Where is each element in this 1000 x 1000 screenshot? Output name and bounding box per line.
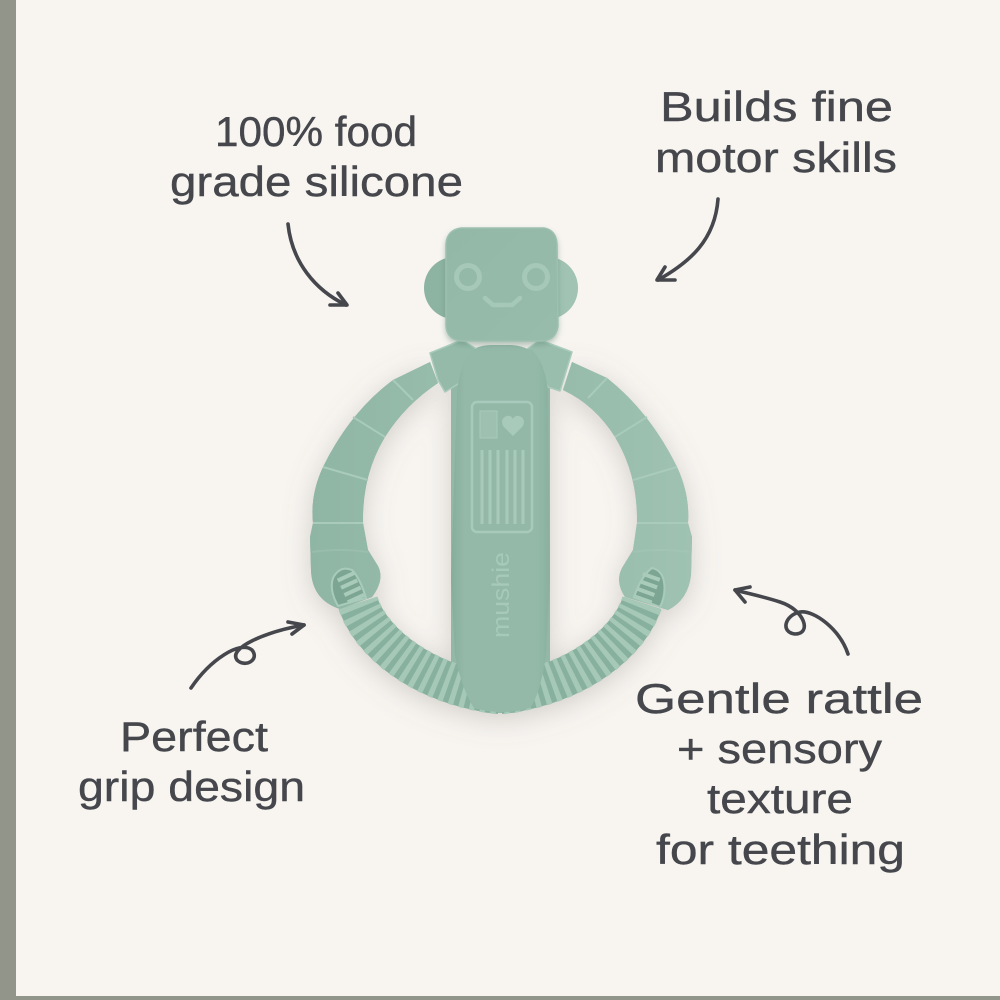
right hand slot [634, 568, 664, 607]
right eye [524, 266, 548, 288]
label: food grade silicone: 100% food [215, 108, 417, 155]
ear right [518, 257, 578, 319]
torso [451, 346, 550, 712]
arm segment lines [312, 378, 690, 552]
left frame bar [0, 0, 16, 1000]
label: food grade silicone: grade silicone [170, 158, 463, 205]
smile [485, 298, 520, 305]
bottom frame bar [0, 996, 1000, 1000]
right spring [500, 575, 652, 694]
label: rattle and sensory texture: Gentle rattle [635, 675, 923, 722]
label: rattle and sensory texture [635, 675, 923, 873]
label: rattle and sensory texture: + sensory [677, 725, 882, 772]
right arm [563, 362, 692, 610]
label: rattle and sensory texture: for teething [656, 826, 905, 873]
robot teether product [310, 228, 692, 713]
label: grip design: Perfect [120, 713, 268, 760]
chest plate [472, 402, 532, 532]
shadow silhouette [310, 345, 692, 713]
label: fine motor skills: motor skills [655, 134, 897, 181]
ear left [424, 257, 484, 319]
arrow: looped to right hand [735, 587, 848, 654]
left shoulder [430, 340, 478, 392]
label: grip design [78, 713, 305, 810]
arrow: to head from silicone label [288, 224, 347, 305]
left arm [310, 362, 438, 609]
left hand slot [332, 569, 366, 606]
label: fine motor skills: Builds fine [660, 83, 893, 130]
head [446, 228, 558, 341]
left spring [345, 575, 500, 694]
brand name: mushie [488, 552, 515, 638]
label: rattle and sensory texture: texture [707, 775, 853, 822]
label: fine motor skills [655, 83, 897, 181]
right shoulder [526, 340, 572, 391]
label: grip design: grip design [78, 763, 305, 810]
arrow: looped to spring [191, 622, 304, 688]
arrow: to head from motor skills label [657, 199, 718, 280]
left eye [456, 266, 480, 288]
label: food grade silicone [170, 108, 463, 205]
